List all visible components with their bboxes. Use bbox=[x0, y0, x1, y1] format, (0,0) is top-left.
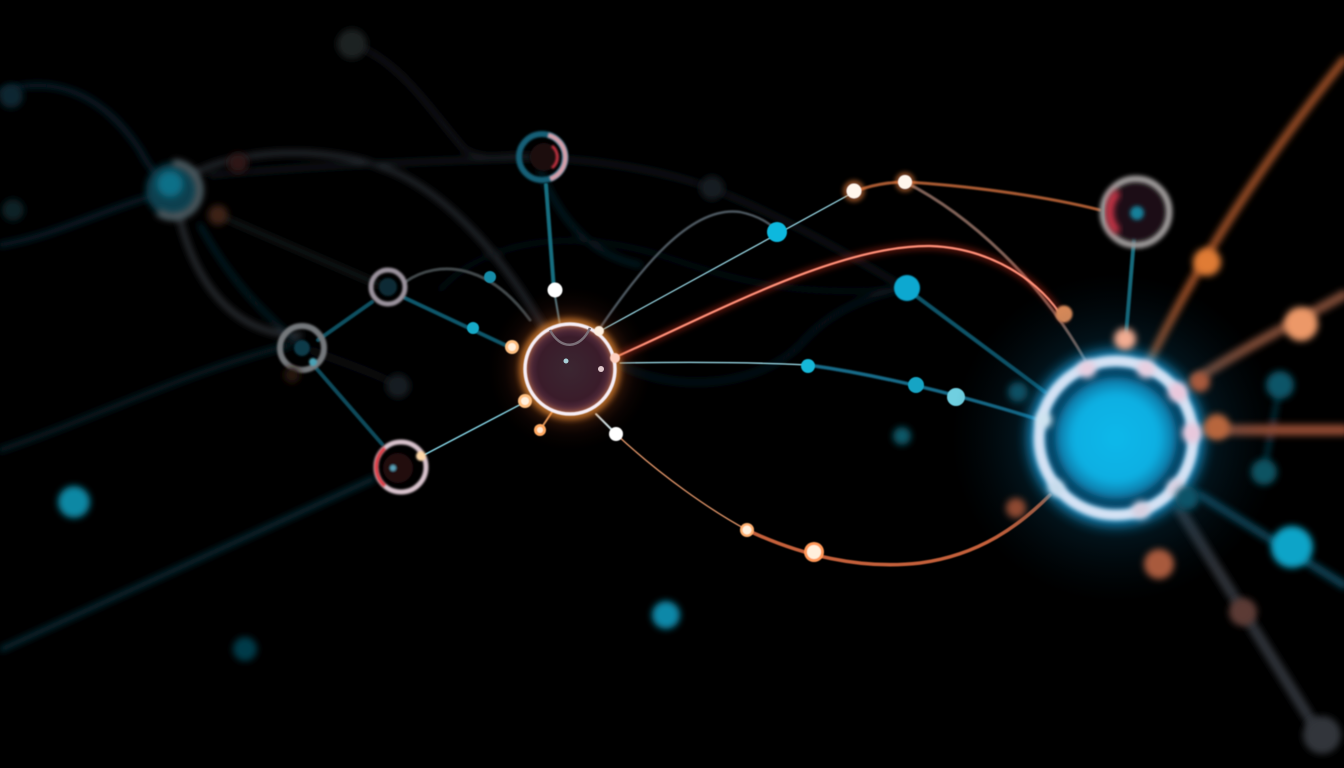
top mid-right nodes bbox=[740, 172, 1072, 562]
blue lower-left connection bbox=[0, 478, 375, 650]
hub perimeter nodes bbox=[1036, 360, 1202, 519]
faint background curves bbox=[0, 44, 905, 450]
far right background spokes bbox=[1150, 60, 1344, 735]
top left ring nodes bbox=[146, 134, 565, 217]
right upper branch bbox=[600, 182, 1136, 420]
central node bbox=[488, 287, 652, 451]
top right ring node bbox=[1103, 179, 1169, 245]
cyan link to lower-left ring bbox=[424, 402, 525, 455]
main blue hub bbox=[951, 273, 1281, 603]
blurred background nodes bbox=[0, 29, 911, 661]
right side blurred nodes bbox=[1006, 248, 1341, 754]
red main curve bbox=[618, 246, 1064, 356]
left network branches bbox=[316, 185, 560, 444]
central node satellites bbox=[467, 271, 623, 441]
orange lower curve bbox=[540, 412, 1050, 565]
thin cyan links bbox=[602, 192, 854, 365]
left ring nodes bbox=[280, 270, 426, 492]
